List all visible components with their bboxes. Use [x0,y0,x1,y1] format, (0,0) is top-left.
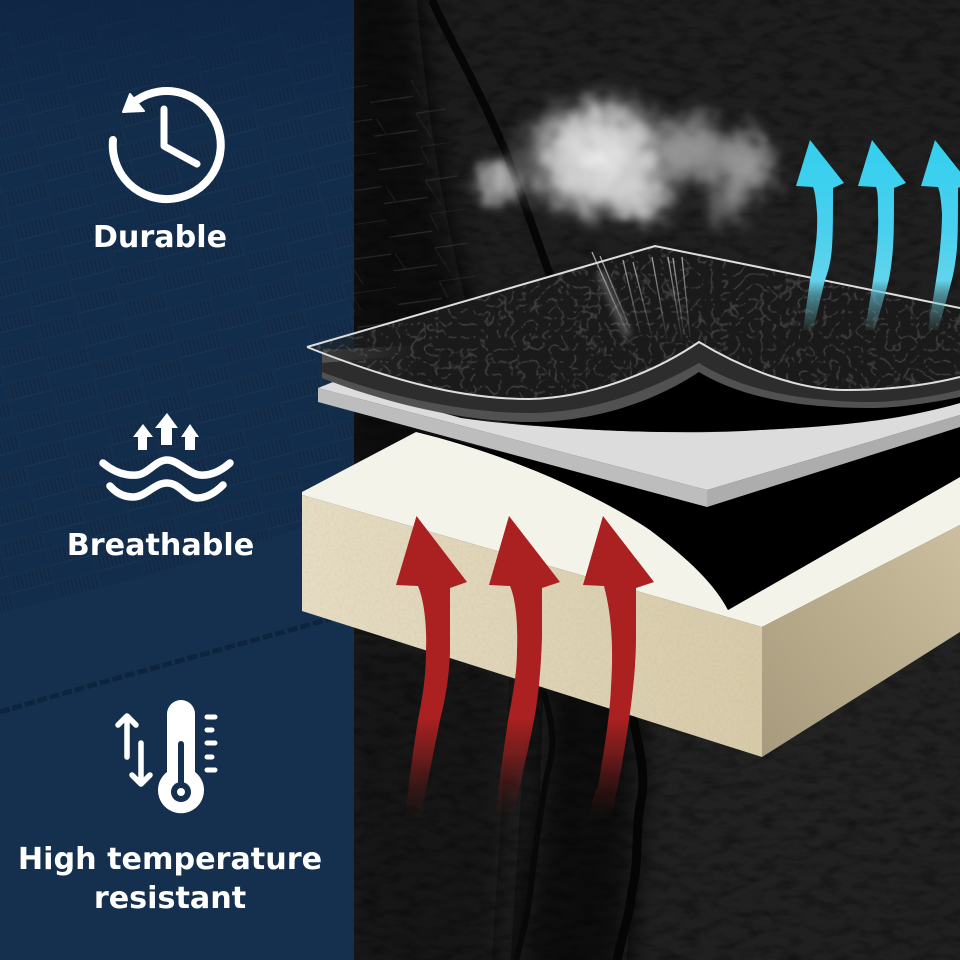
icon: breathable waves and arrows [103,413,230,498]
icon: clock with return arrow [113,91,221,199]
background: black leather [340,0,960,960]
arrows: blue rising air [796,140,960,330]
illustration: black cavity in foam [416,420,960,610]
illustration: leather top layer [300,240,960,400]
illustration: leather underside layers [322,330,960,422]
icon: thermometer with arrows [118,700,215,813]
heading: Breathable: Breathable [67,528,254,563]
illustration: black gap under leather [440,340,960,432]
heading: High temperature resistant: resistant [94,881,246,916]
heading: High temperature resistant [18,842,322,916]
heading: Durable: Durable [93,220,227,255]
heading: High temperature resistant: High temperature [18,842,322,877]
illustration: foam layer [302,432,960,760]
panel: blue sidebar [0,0,354,960]
illustration: white middle layer [318,382,960,507]
arrows: red rising heat [396,516,654,820]
illustration: steam cloud [468,86,783,230]
